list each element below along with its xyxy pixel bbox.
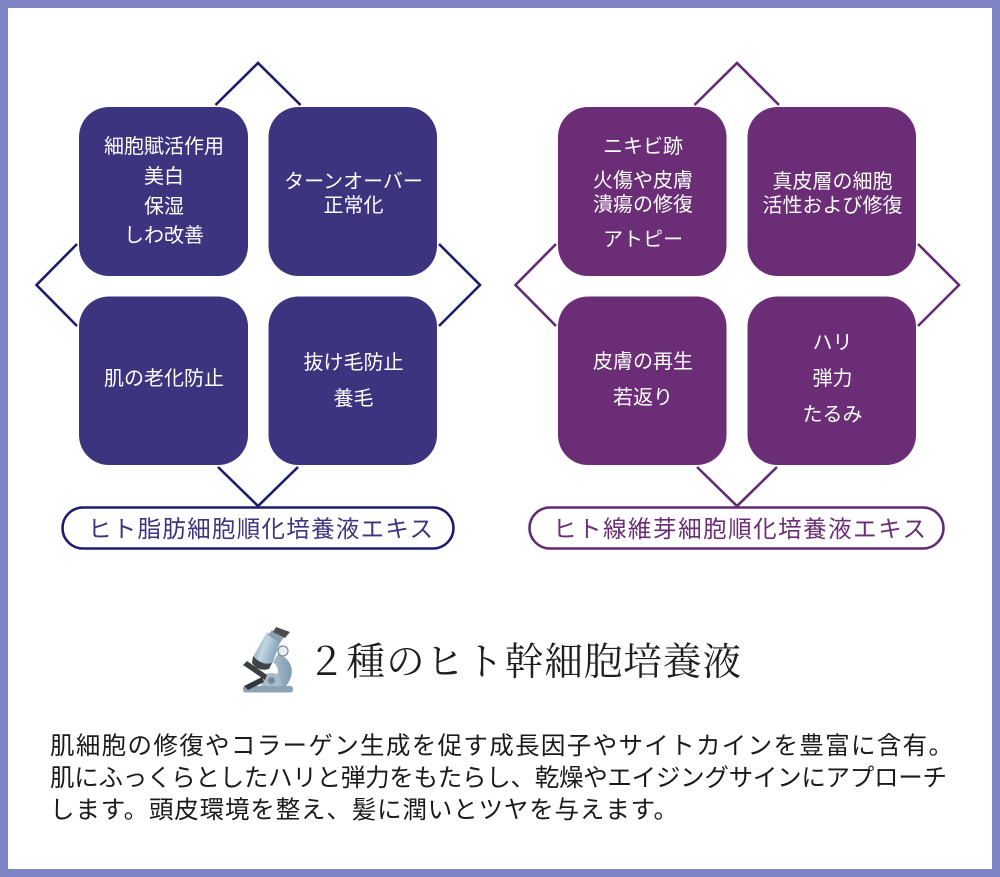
card: bottom right bbox=[748, 296, 916, 465]
card: top left: 美白 bbox=[144, 165, 184, 188]
card: top right: 活性および修復 bbox=[762, 194, 902, 217]
card: top left: 保湿 bbox=[144, 195, 184, 218]
card: top left: 潰瘍の修復 bbox=[593, 193, 693, 216]
panel: human adipocyte conditioned medium extract bbox=[36, 63, 480, 548]
card: top left bbox=[79, 107, 248, 276]
card: bottom left: 若返り bbox=[613, 386, 673, 409]
panel: human fibroblast conditioned medium extract bbox=[516, 63, 959, 548]
body text: 肌細胞の修復やコラーゲン生成を促す成長因子やサイトカインを豊富に含有。 bbox=[50, 732, 953, 760]
label pill: purple bbox=[530, 508, 944, 548]
card: top left bbox=[558, 107, 726, 276]
card: bottom right bbox=[268, 296, 437, 465]
card: top left: ニキビ跡 bbox=[603, 135, 683, 158]
card: bottom left: 皮膚の再生 bbox=[593, 350, 693, 373]
body text bbox=[50, 732, 953, 824]
card: bottom left: 肌の老化防止 bbox=[104, 367, 224, 390]
card: bottom right: 養毛 bbox=[334, 387, 374, 410]
label pill: purple: ヒト線維芽細胞順化培養液エキス bbox=[553, 516, 926, 542]
diamond outline: purple bbox=[516, 63, 959, 506]
label pill: navy bbox=[62, 508, 454, 548]
body text: 肌にふっくらとしたハリと弾力をもたらし、乾燥やエイジングサインにアプローチ bbox=[50, 764, 947, 792]
card: top right bbox=[748, 107, 916, 276]
card: top right: ターンオーバー bbox=[284, 170, 423, 193]
card: bottom left bbox=[558, 296, 726, 465]
card: top right: 正常化 bbox=[324, 194, 384, 217]
card: top left: しわ改善 bbox=[124, 224, 204, 247]
card: bottom right: たるみ bbox=[802, 404, 862, 426]
card: top left: 細胞賦活作用 bbox=[104, 135, 224, 158]
card: bottom right: 抜け毛防止 bbox=[304, 351, 404, 374]
icon: microscope bbox=[243, 627, 293, 692]
card: bottom right: ハリ bbox=[812, 332, 852, 354]
body text: します。頭皮環境を整え、髪に潤いとツヤを与えます。 bbox=[50, 796, 678, 824]
card: bottom right: 弾力 bbox=[812, 367, 852, 390]
card: bottom left bbox=[79, 296, 248, 465]
card: top right: 真皮層の細胞 bbox=[772, 170, 892, 193]
diamond outline: navy bbox=[36, 63, 480, 506]
card: top right bbox=[268, 107, 437, 276]
label pill: navy: ヒト脂肪細胞順化培養液エキス bbox=[88, 516, 433, 542]
card: top left: 火傷や皮膚 bbox=[593, 169, 693, 192]
title: ２種のヒト幹細胞培養液 bbox=[307, 642, 741, 684]
card: top left: アトピー bbox=[603, 229, 683, 251]
